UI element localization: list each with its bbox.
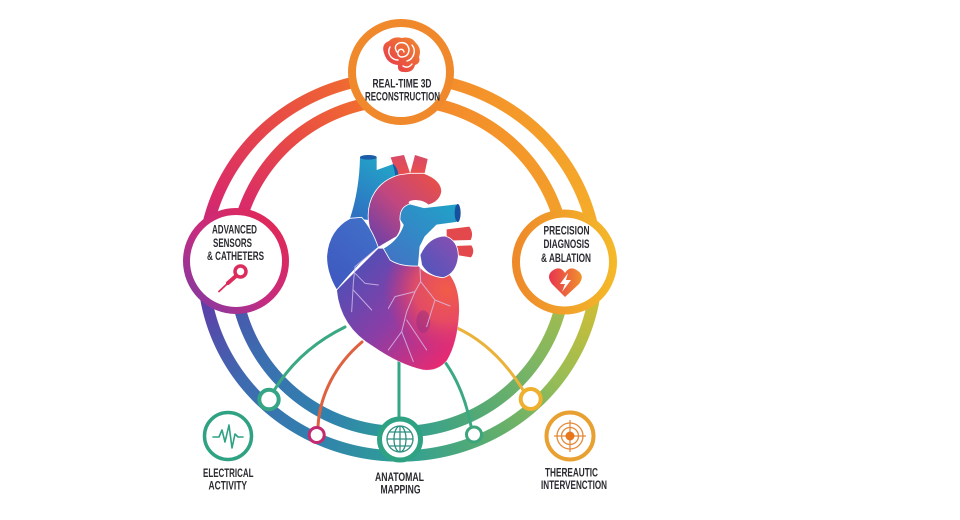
- label: precision diagnosis and ablation: DIAGNOSIS: [544, 239, 590, 251]
- icon: globe: [387, 426, 413, 452]
- node: advanced sensors and catheters: [186, 212, 286, 310]
- label: thereautic intervenction: THEREAUTIC: [545, 468, 598, 480]
- label: advanced sensors and catheters: & CATHETERS: [207, 251, 264, 263]
- ring junction: magenta marker: [309, 428, 324, 442]
- ring junction: green right marker: [466, 427, 482, 442]
- label: advanced sensors and catheters: SENSORS: [213, 238, 252, 250]
- label: anatomal mapping: [375, 472, 424, 496]
- pulmonary artery: [383, 204, 461, 266]
- ring junction: green marker: [259, 390, 279, 409]
- label: real-time 3D reconstruction: REAL-TIME 3D: [372, 78, 432, 90]
- node: real-time 3D reconstruction: [352, 23, 450, 121]
- label: precision diagnosis and ablation: & ABLATION: [541, 253, 591, 265]
- icon: heart with lightning bolt: [549, 268, 582, 297]
- central anatomical heart: [327, 155, 473, 370]
- label: thereautic intervenction: [541, 468, 607, 492]
- connector lines from heart to rings: [275, 327, 523, 426]
- label: thereautic intervenction: INTERVENCTION: [541, 480, 607, 492]
- aortic branches: [391, 155, 428, 179]
- label: electrical activity: ELECTRICAL: [203, 468, 254, 480]
- label: precision diagnosis and ablation: PRECISION: [544, 226, 590, 238]
- label: anatomal mapping: ANATOMAL: [375, 472, 424, 484]
- coronary vessels: [352, 250, 450, 362]
- ring junction: yellow marker: [521, 389, 541, 409]
- inner gradient ring: [228, 94, 572, 438]
- label: electrical activity: ACTIVITY: [208, 480, 247, 492]
- left atrium: [420, 236, 458, 278]
- aortic gap: [409, 200, 422, 205]
- right atrium: [327, 217, 378, 290]
- label: advanced sensors and catheters: [207, 224, 264, 263]
- aortic arch: [368, 173, 442, 247]
- superior vena cava: [350, 155, 399, 220]
- icon: catheter: [219, 266, 246, 292]
- label: precision diagnosis and ablation: [541, 226, 591, 265]
- ventricle body: [337, 248, 459, 370]
- pulmonary veins: [447, 227, 473, 257]
- node: precision diagnosis and ablation: [516, 214, 613, 310]
- label: anatomal mapping: MAPPING: [380, 484, 421, 496]
- label: advanced sensors and catheters: ADVANCED: [212, 224, 257, 236]
- icon: therapeutic target: [546, 412, 594, 460]
- label: real-time 3D reconstruction: [365, 78, 440, 104]
- outer gradient ring: [197, 70, 603, 462]
- node: anatomical mapping: [380, 419, 420, 460]
- icon: electrical activity: [204, 412, 252, 460]
- icon: brain: [383, 37, 420, 72]
- label: real-time 3D reconstruction: RECONSTRUCTION: [365, 92, 440, 104]
- label: electrical activity: [203, 468, 254, 492]
